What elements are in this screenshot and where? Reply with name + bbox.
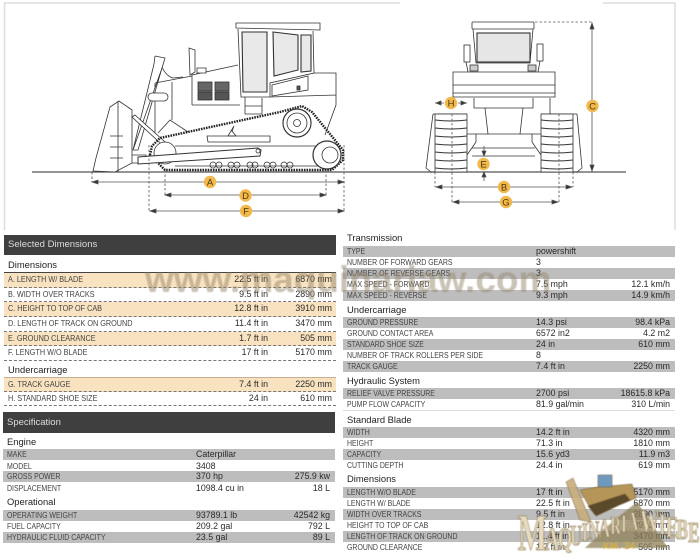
row: height to top of cab: 12.8 ft in <box>536 520 570 530</box>
row: standard shoe size: STANDARD SHOE SIZE <box>347 339 424 349</box>
watermark: website: www.maquinariaw.com <box>145 259 551 300</box>
row: standard shoe size: 610 mm <box>638 339 670 349</box>
track rollers <box>210 162 293 168</box>
row: hydraulic fluid capacity: HYDRAULIC FLUID CAPACITY <box>7 532 106 542</box>
row: F: 5170 mm <box>295 347 332 357</box>
row: fuel capacity <box>7 520 330 531</box>
row: hydraulic fluid capacity: 89 L <box>313 532 330 542</box>
row: gross power: 370 hp <box>196 471 223 481</box>
row: track gauge <box>343 361 675 372</box>
row: G: 7.4 ft in <box>239 379 268 389</box>
row: make: Caterpillar <box>196 449 236 459</box>
row: model: MODEL <box>7 460 32 470</box>
subheading: Undercarriage: Undercarriage <box>347 304 406 315</box>
row: length of track on ground: 3470 mm <box>633 530 670 540</box>
logo lettering: Wiebe: B <box>677 514 688 545</box>
row: blade width <box>343 426 675 438</box>
subheading: Transmission: Transmission <box>347 232 402 243</box>
subheading: Engine: Engine <box>7 436 36 447</box>
row: A: 6870 mm <box>295 274 332 284</box>
row: length w/ blade <box>347 498 670 508</box>
row: width over tracks <box>343 509 675 520</box>
row: width over tracks: 9.5 ft in <box>536 509 565 519</box>
row: relief valve pressure <box>343 388 675 399</box>
row: width over tracks: WIDTH OVER TRACKS <box>347 509 422 519</box>
logo lettering: Wiebe: E <box>666 512 678 544</box>
row: E: 1.7 ft in <box>239 333 268 343</box>
row: length w/o blade: 5170 mm <box>633 486 670 496</box>
diagram frame <box>4 3 675 230</box>
row: H <box>4 392 336 406</box>
row: operating weight <box>3 510 335 520</box>
dimension badges: B <box>501 182 507 194</box>
row: model <box>7 460 216 470</box>
row: ground pressure <box>343 317 675 328</box>
left track <box>426 114 467 172</box>
row: E <box>4 332 336 346</box>
logo: Maquinaria Wiebe <box>517 474 700 560</box>
row: ground pressure: GROUND PRESSURE <box>347 317 418 327</box>
row: model: 3408 <box>196 460 216 470</box>
row: make: MAKE <box>7 449 27 459</box>
row: gross power: 275.9 kw <box>295 471 330 481</box>
row: displacement: 18 L <box>313 482 330 492</box>
row: relief valve pressure: RELIEF VALVE PRESSURE <box>347 388 435 398</box>
row: F: 17 ft in <box>242 347 268 357</box>
row: D <box>4 317 336 332</box>
row: C <box>4 302 336 317</box>
row: cutting depth: 24.4 in <box>536 460 562 470</box>
row: blade height: HEIGHT <box>347 438 373 448</box>
row: blade width: 4320 mm <box>633 426 670 436</box>
row: reverse gears <box>343 268 675 278</box>
row: max speed forward <box>347 278 670 289</box>
row: B: 2890 mm <box>295 289 332 299</box>
row: H: 610 mm <box>300 393 332 403</box>
row: A: 22.5 ft in <box>234 274 268 284</box>
row: G: G. TRACK GAUGE <box>8 379 70 389</box>
engine hood and grille <box>189 48 240 105</box>
heading: Specification <box>3 412 335 433</box>
logo lettering: Maquinaria: A <box>545 521 560 558</box>
row: displacement <box>7 482 330 492</box>
front view dimensions <box>435 22 594 204</box>
ground line <box>32 171 350 173</box>
row: G <box>4 377 336 392</box>
row: hydraulic fluid capacity <box>3 532 335 542</box>
logo lettering: Maquinaria: A <box>627 507 639 536</box>
row: B: B. WIDTH OVER TRACKS <box>8 289 95 299</box>
row: type: powershift <box>536 246 576 256</box>
row: forward gears: NUMBER OF FORWARD GEARS <box>347 256 453 266</box>
row: max speed forward: 7.5 mph <box>536 278 568 288</box>
row: E: E. GROUND CLEARANCE <box>8 333 96 343</box>
row: capacity: 11.9 m3 <box>639 448 670 458</box>
row: length w/ blade: 22.5 ft in <box>536 498 570 508</box>
row: max speed forward: MAX SPEED - FORWARD <box>347 278 429 288</box>
dimension badges <box>204 97 599 218</box>
row: ground contact area: 6572 in2 <box>536 328 570 338</box>
row: max speed forward: 12.1 km/h <box>631 278 670 288</box>
dimension badges: H <box>448 98 455 110</box>
row: F: F. LENGTH W/O BLADE <box>8 347 87 357</box>
row: length of track on ground <box>343 530 675 542</box>
row: operating weight: 93789.1 lb <box>196 510 237 520</box>
row: length w/o blade: 17 ft in <box>536 486 562 496</box>
row: ground clearance: 1.7 ft in <box>536 542 565 552</box>
row: C: 12.8 ft in <box>234 303 268 313</box>
row: blade width: WIDTH <box>347 426 370 436</box>
heading: Selected Dimensions <box>4 235 336 255</box>
rule <box>4 272 336 273</box>
front body <box>453 72 555 97</box>
logo km text: KM. 24 <box>603 541 636 551</box>
row: length of track on ground: 11.4 ft in <box>536 530 569 540</box>
row: max speed reverse: MAX SPEED - REVERSE <box>347 290 427 300</box>
row: E: 505 mm <box>300 333 332 343</box>
row: ground clearance: GROUND CLEARANCE <box>347 542 422 552</box>
subheading: Operational: Operational <box>7 496 55 507</box>
row: max speed reverse <box>343 290 675 300</box>
row: D: 3470 mm <box>295 318 332 328</box>
logo lettering: Maquinaria: U <box>570 520 582 551</box>
row: type <box>343 246 675 256</box>
dimension badges: G <box>502 198 510 208</box>
logo dozer <box>566 475 636 522</box>
row: blade height: 71.3 in <box>536 438 562 448</box>
row: C: C. HEIGHT TO TOP OF CAB <box>8 303 102 313</box>
logo lettering: Maquinaria: N <box>588 516 600 545</box>
logo lettering: Maquinaria: I <box>621 511 627 538</box>
row: height to top of cab <box>347 520 670 530</box>
dimension badges: A <box>207 178 214 188</box>
logo lettering: Maquinaria: I <box>582 518 588 547</box>
dimension badges: F <box>243 206 249 218</box>
row: height to top of cab: HEIGHT TO TOP OF CAB <box>347 520 428 530</box>
diagrams: side and front views <box>4 2 676 230</box>
row: length w/ blade: 6870 mm <box>633 498 670 508</box>
row: length w/o blade <box>343 486 675 498</box>
rear body <box>270 73 336 135</box>
subheading: Dimensions: Dimensions <box>8 259 57 270</box>
panel: selected dimensions <box>4 235 336 406</box>
subheading: Hydraulic System: Hydraulic System <box>347 375 420 386</box>
logo lettering: Maquinaria: R <box>610 513 622 540</box>
track <box>150 106 343 170</box>
row: fuel capacity: 792 L <box>308 520 330 530</box>
row: ground contact area: GROUND CONTACT AREA <box>347 328 433 338</box>
row: blade height <box>347 438 670 448</box>
row: gross power <box>3 471 335 482</box>
row: blade height: 1810 mm <box>633 438 670 448</box>
row: standard shoe size: 24 in <box>536 339 555 349</box>
row: forward gears <box>347 256 541 266</box>
row: B <box>4 288 336 302</box>
logo lettering: Maquinaria: A <box>599 514 610 543</box>
blade <box>93 101 174 172</box>
row: D: D. LENGTH OF TRACK ON GROUND <box>8 318 133 328</box>
row: ground clearance: 505 mm <box>638 542 670 552</box>
row: H: 24 in <box>249 393 268 403</box>
row: pump flow capacity: 310 L/min <box>631 399 670 409</box>
side view dimensions <box>92 145 344 213</box>
heading: Specification: Specification <box>7 417 61 428</box>
row: operating weight: 42542 kg <box>294 510 330 520</box>
row: reverse gears: 3 <box>536 268 541 278</box>
side view: bulldozer <box>32 23 350 172</box>
row: width over tracks: 2890 mm <box>633 509 670 519</box>
row: pump flow capacity <box>343 399 675 411</box>
subheading: Standard Blade: Standard Blade <box>347 414 412 425</box>
row: ground clearance <box>347 542 670 552</box>
ground line <box>350 171 626 173</box>
row: fuel capacity: FUEL CAPACITY <box>7 520 61 530</box>
logo lettering: Wiebe: E <box>688 517 699 548</box>
row: type: TYPE <box>347 246 365 256</box>
row: displacement: DISPLACEMENT <box>7 482 61 492</box>
row: C: 3910 mm <box>295 303 332 313</box>
row: H: H. STANDARD SHOE SIZE <box>8 393 97 403</box>
row: D: 11.4 ft in <box>235 318 268 328</box>
row: A: A. LENGTH W/ BLADE <box>8 274 83 284</box>
row: length w/o blade: LENGTH W/O BLADE <box>347 486 416 496</box>
row: cutting depth <box>347 460 670 470</box>
row: standard shoe size <box>343 339 675 350</box>
row: pump flow capacity: 81.9 gal/min <box>536 399 584 409</box>
row: track rollers: 8 <box>536 350 541 360</box>
row: F <box>4 346 336 361</box>
cab <box>236 23 320 114</box>
row: G: 2250 mm <box>295 379 332 389</box>
subheading: Dimensions: Dimensions <box>347 473 396 484</box>
dimension badges: C <box>589 102 596 112</box>
row: track gauge: TRACK GAUGE <box>347 361 398 371</box>
row: ground pressure: 14.3 psi <box>536 317 567 327</box>
heading: Selected Dimensions: Selected Dimensions <box>8 239 97 250</box>
row: capacity: CAPACITY <box>347 448 381 458</box>
row: make <box>3 449 335 460</box>
dimension badges: E <box>480 160 487 170</box>
row: A <box>4 273 336 288</box>
row: track rollers: NUMBER OF TRACK ROLLERS PER SIDE <box>347 350 483 360</box>
row: fuel capacity: 209.2 gal <box>196 520 232 530</box>
right track <box>541 114 582 172</box>
subheading: Undercarriage: Undercarriage <box>8 364 67 375</box>
row: max speed reverse: 9.3 mph <box>536 290 568 300</box>
sprocket <box>283 109 311 137</box>
row: reverse gears: NUMBER OF REVERSE GEARS <box>347 268 450 278</box>
row: capacity: 15.6 yd3 <box>536 448 570 458</box>
row: forward gears: 3 <box>536 256 541 266</box>
row: capacity <box>343 448 675 460</box>
row: blade width: 14.2 ft in <box>536 426 570 436</box>
row: length of track on ground: LENGTH OF TRACK ON GROUND <box>347 530 457 540</box>
logo lettering: Wiebe: W <box>640 503 659 539</box>
row: relief valve pressure: 2700 psi <box>536 388 569 398</box>
row: length w/ blade: LENGTH W/ BLADE <box>347 498 410 508</box>
row: operating weight: OPERATING WEIGHT <box>7 510 77 520</box>
row: pump flow capacity: PUMP FLOW CAPACITY <box>347 399 425 409</box>
row: max speed reverse: 14.9 km/h <box>631 290 670 300</box>
logo mound <box>585 502 668 548</box>
row: ground contact area <box>347 328 670 338</box>
track frame and idler <box>138 126 341 169</box>
lower body <box>467 98 550 156</box>
front cab <box>464 22 543 72</box>
row: displacement: 1098.4 cu in <box>196 482 244 492</box>
row: cutting depth: 619 mm <box>638 460 670 470</box>
row: height to top of cab: 3910 mm <box>633 520 670 530</box>
row: track gauge: 7.4 ft in <box>536 361 565 371</box>
row: B: 9.5 ft in <box>239 289 268 299</box>
row: track gauge: 2250 mm <box>633 361 670 371</box>
row: cutting depth: CUTTING DEPTH <box>347 460 403 470</box>
row: relief valve pressure: 18615.8 kPa <box>621 388 670 398</box>
logo lettering: Wiebe: I <box>659 509 666 541</box>
row: ground contact area: 4.2 m2 <box>643 328 670 338</box>
logo lettering: Maquinaria: Q <box>558 523 572 555</box>
lift arm <box>133 56 183 150</box>
row: gross power: GROSS POWER <box>7 471 60 481</box>
front view: bulldozer <box>350 22 626 172</box>
row: ground pressure: 98.4 kPa <box>635 317 670 327</box>
front frame <box>155 76 192 133</box>
dimension badges: D <box>242 191 249 202</box>
row: hydraulic fluid capacity: 23.5 gal <box>196 532 227 542</box>
